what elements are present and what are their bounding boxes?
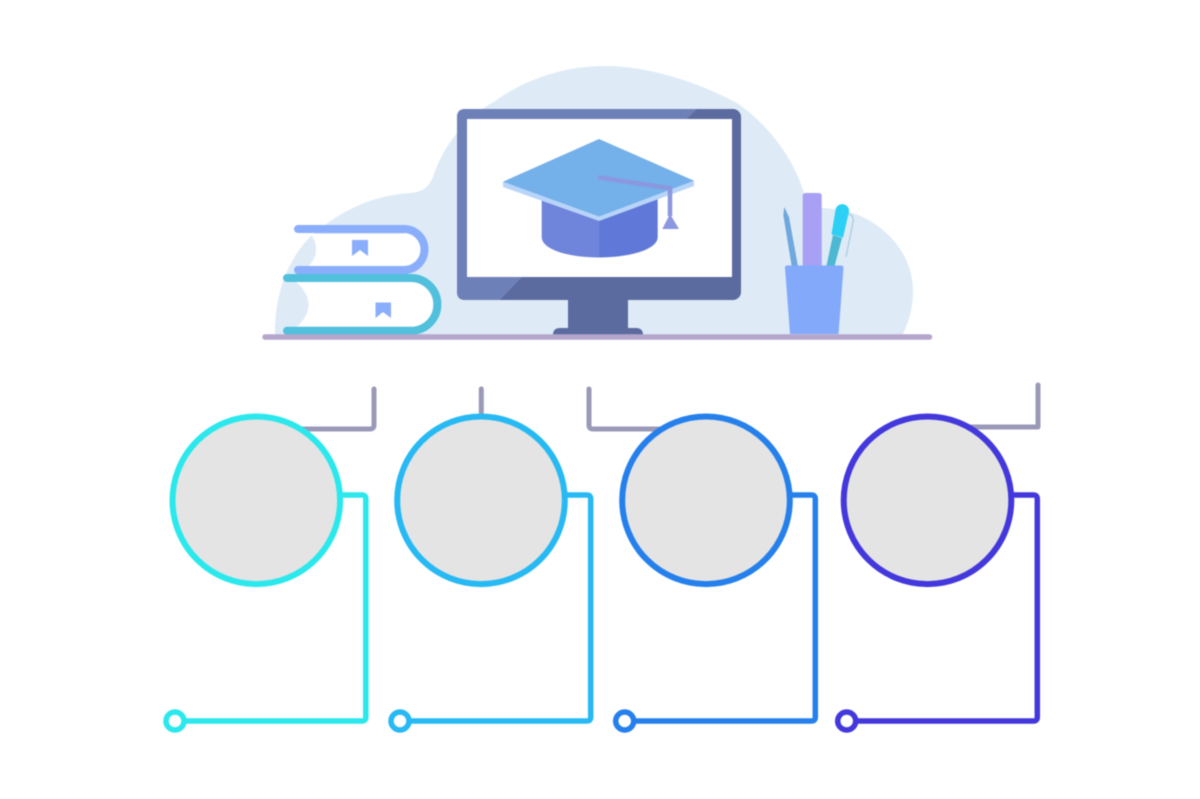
end node bbox=[838, 712, 856, 730]
pen cup bbox=[783, 193, 853, 334]
coloured connector bbox=[409, 495, 591, 721]
end node bbox=[166, 712, 184, 730]
frame highlight bbox=[457, 109, 697, 300]
end node bbox=[616, 712, 634, 730]
cup bbox=[785, 266, 844, 334]
grey connector bbox=[970, 385, 1038, 427]
step 1 bbox=[166, 389, 374, 730]
circle bbox=[622, 416, 790, 584]
grey connector bbox=[589, 389, 665, 429]
ruler bbox=[803, 193, 822, 268]
end node bbox=[391, 712, 409, 730]
stand bbox=[553, 298, 643, 335]
grey connector bbox=[300, 389, 374, 429]
frame bbox=[457, 109, 741, 300]
cap board edge bbox=[503, 181, 694, 221]
step 4 bbox=[838, 385, 1038, 730]
pen bbox=[826, 204, 853, 268]
books bbox=[287, 229, 437, 331]
cap body bbox=[542, 199, 599, 258]
book: bottom bbox=[287, 278, 437, 331]
grey connector bbox=[479, 389, 484, 416]
screen bbox=[467, 119, 732, 277]
step 3 bbox=[589, 389, 815, 730]
step 2 bbox=[391, 389, 591, 730]
circle bbox=[172, 416, 340, 584]
cap board bbox=[503, 139, 694, 216]
circle bbox=[397, 416, 565, 584]
icon: graduation cap bbox=[503, 139, 694, 258]
pencil bbox=[783, 207, 798, 268]
illustration: desk scene bbox=[265, 66, 930, 337]
coloured connector bbox=[184, 495, 366, 721]
bookmark bbox=[352, 240, 368, 256]
coloured connector bbox=[634, 495, 815, 721]
monitor bbox=[457, 109, 741, 335]
book: top bbox=[298, 229, 424, 270]
background cloud bbox=[275, 66, 913, 336]
circle bbox=[844, 416, 1011, 584]
desk shelf bbox=[265, 334, 930, 340]
tassel bbox=[598, 177, 679, 229]
bookmark bbox=[376, 302, 391, 318]
coloured connector bbox=[856, 495, 1037, 721]
